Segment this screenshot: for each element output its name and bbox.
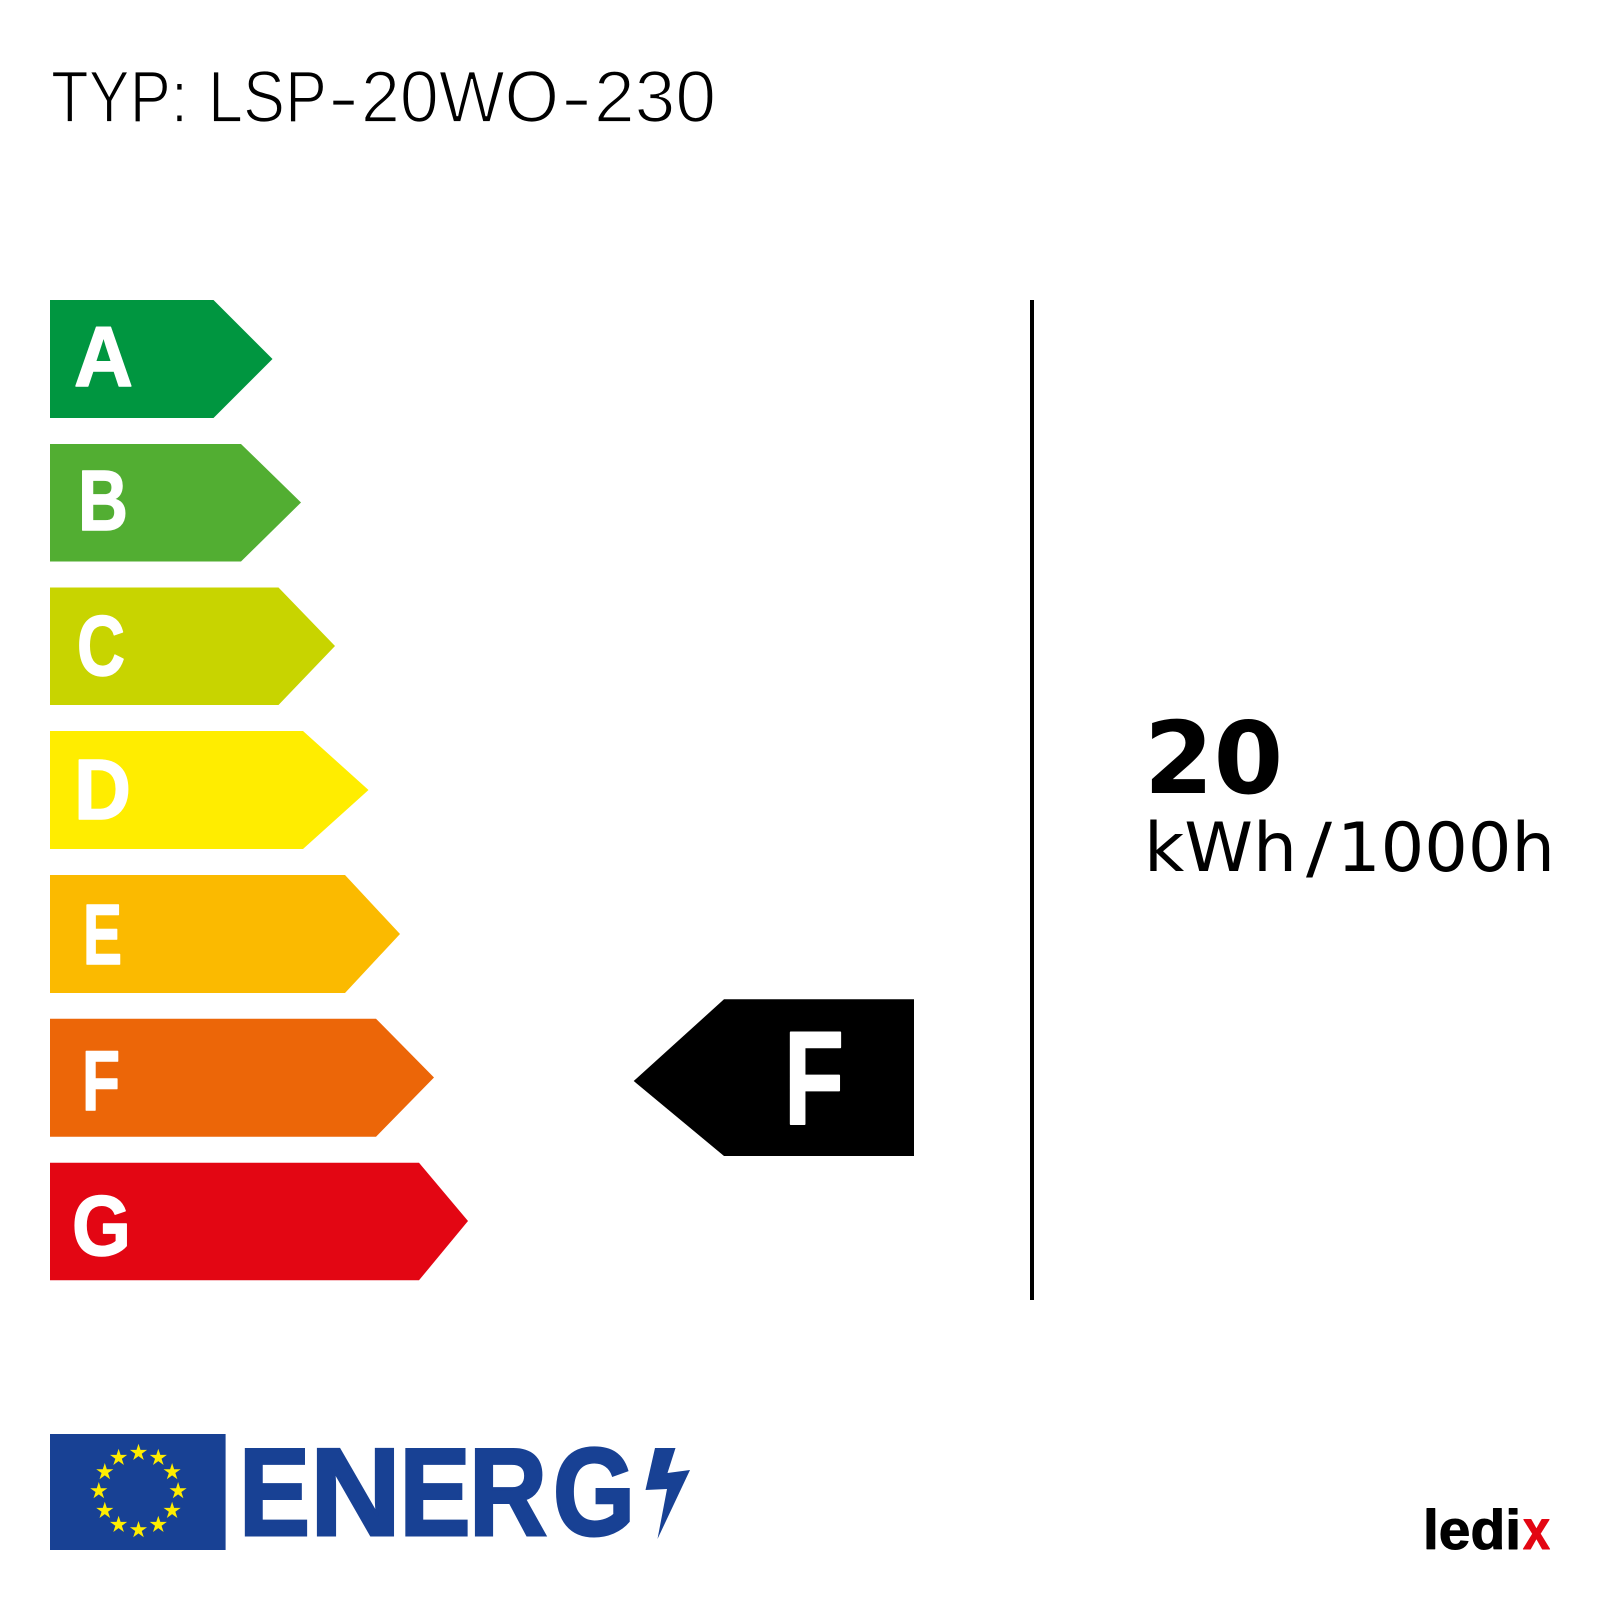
ENERG wordmark: E	[400, 1424, 470, 1562]
consumption unit: 1000h	[1337, 809, 1555, 888]
ledix logo: ledi	[1423, 1498, 1521, 1561]
icon: lightning bolt	[646, 1448, 690, 1539]
consumption unit	[1144, 809, 1555, 888]
title: LSP	[208, 57, 327, 138]
bar: class A: A	[74, 310, 133, 405]
bar: class A	[50, 300, 272, 418]
ledix logo: x	[1523, 1498, 1550, 1561]
title: -	[328, 57, 359, 138]
bar: class C	[50, 588, 335, 705]
ENERG wordmark: N	[310, 1424, 401, 1562]
vertical divider	[1030, 300, 1034, 1300]
ENERG wordmark: G	[553, 1424, 635, 1562]
energy class scale	[50, 300, 468, 1280]
EU flag	[50, 1434, 226, 1550]
title	[51, 57, 716, 138]
bar: class B: B	[78, 454, 128, 549]
bar: class G: G	[72, 1179, 131, 1274]
bar: class B	[50, 444, 301, 562]
bar: class G	[50, 1163, 468, 1280]
consumption value: 20	[1144, 700, 1283, 817]
title: -	[561, 57, 592, 138]
bar: class E	[50, 875, 400, 993]
title: 20WO	[361, 57, 559, 138]
bar: class E: E	[83, 888, 122, 983]
bar: class C: C	[77, 599, 125, 694]
consumption unit: /	[1306, 809, 1332, 888]
consumption unit: kWh	[1144, 809, 1297, 888]
rating arrow: F: F	[784, 1005, 844, 1153]
bar: class D	[50, 731, 368, 849]
bar: class F	[50, 1019, 434, 1137]
ENERG wordmark	[239, 1424, 635, 1562]
ENERG wordmark: R	[469, 1424, 547, 1562]
title: 230	[594, 57, 716, 138]
ENERG wordmark: E	[239, 1424, 310, 1562]
title: TYP:	[51, 57, 188, 138]
bar: class D: D	[74, 743, 131, 838]
rating arrow: F	[634, 999, 914, 1156]
bar: class F: F	[82, 1034, 120, 1129]
